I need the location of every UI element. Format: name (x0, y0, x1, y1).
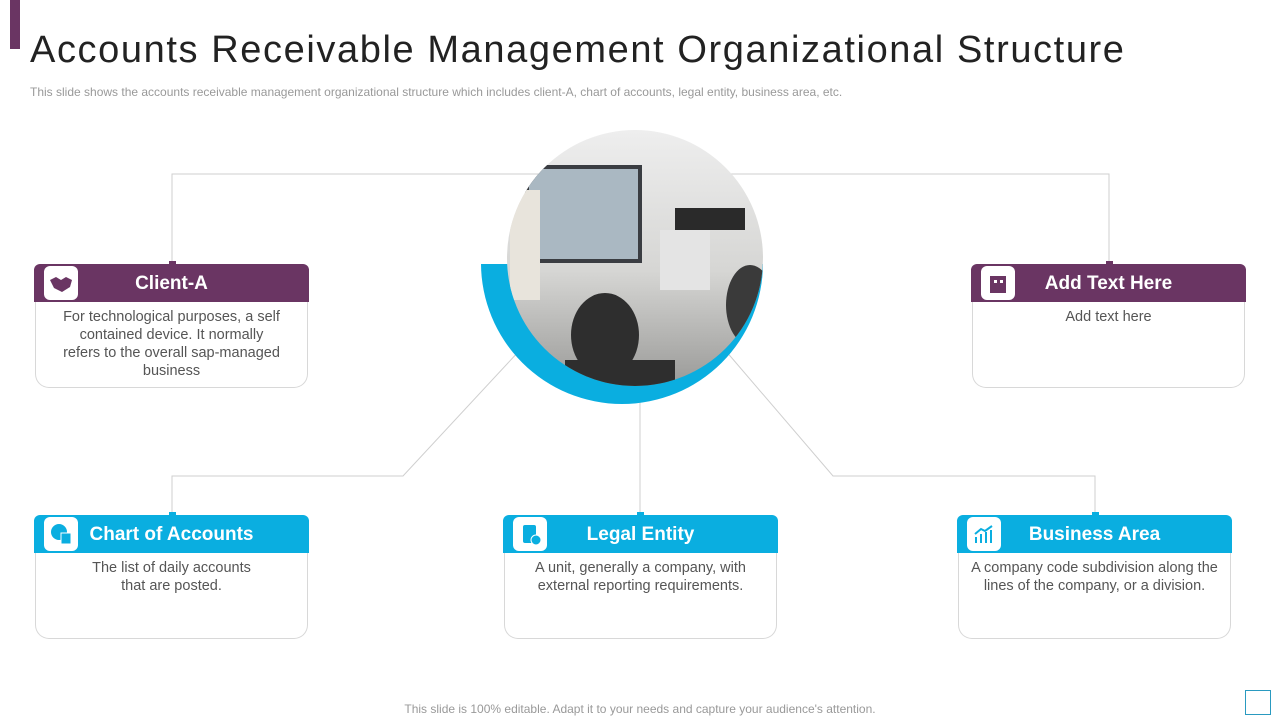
accent bar (10, 0, 20, 49)
icon: building (981, 266, 1015, 300)
footer note: This slide is 100% editable. Adapt it to your needs and capture your audience's attention. (404, 702, 876, 716)
center image with blue arc (481, 130, 763, 404)
card: Business Area (957, 515, 1232, 639)
card: Legal Entity: A unit, generally a company, with (535, 560, 746, 576)
card: Chart of Accounts: Chart of Accounts (90, 524, 253, 545)
card: Chart of Accounts (34, 515, 309, 639)
card: Add Text Here: Add Text Here (1045, 273, 1172, 294)
subtitle: This slide shows the accounts receivable management organizational structure which includes client-A, chart of accounts, legal entity, business area, etc. (30, 85, 842, 99)
corner box (1245, 690, 1271, 715)
card: Add Text Here (971, 264, 1246, 388)
card: Chart of Accounts: The list of daily accounts (92, 560, 251, 576)
card: Legal Entity: external reporting requirements. (538, 578, 743, 594)
card: Legal Entity: Legal Entity (587, 524, 694, 545)
card: Business Area: Business Area (1029, 524, 1160, 545)
card: Client-A (34, 264, 309, 388)
card: Client-A: Client-A (135, 273, 208, 294)
card: Client-A: For technological purposes, a self (63, 309, 280, 325)
card: Client-A: contained device. It normally (80, 327, 263, 343)
title: Accounts Receivable Management Organizational Structure (30, 29, 1126, 71)
card: Client-A: refers to the overall sap-managed (63, 345, 280, 361)
card: Client-A: business (143, 363, 200, 379)
icon: bar chart (967, 517, 1001, 551)
icon: handshake (44, 266, 78, 300)
card: Chart of Accounts: that are posted. (121, 578, 222, 594)
card: Business Area: A company code subdivision along the (971, 560, 1218, 576)
icon: pie chart (44, 517, 78, 551)
icon: clipboard (513, 517, 547, 551)
card: Add Text Here: Add text here (1065, 309, 1152, 325)
card: Legal Entity (503, 515, 778, 639)
card: Business Area: lines of the company, or a division. (984, 578, 1205, 594)
